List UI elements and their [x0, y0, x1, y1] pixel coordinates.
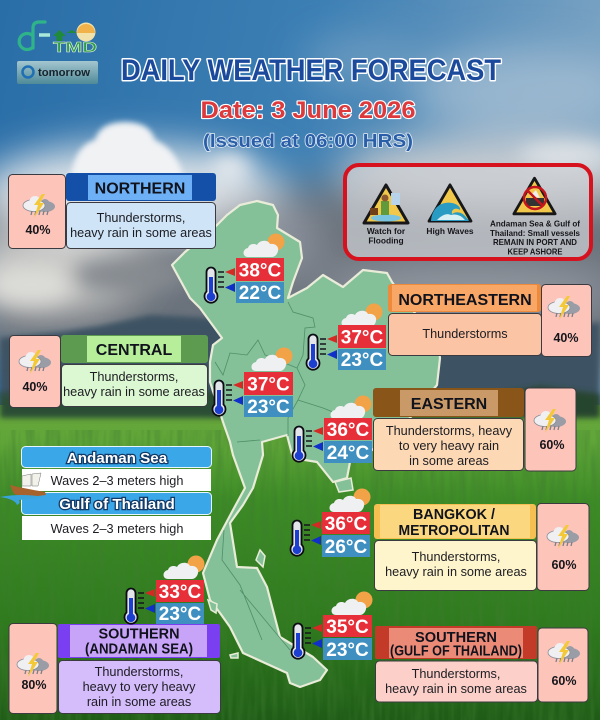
gulf of thailand waves: Waves 2–3 meters high	[51, 522, 183, 536]
gulf of thailand heading	[22, 492, 212, 514]
central temperatures: 23°C	[247, 397, 290, 418]
southern gulf rain chance	[538, 628, 588, 702]
southern andaman rain chance: 80%	[21, 678, 47, 692]
southern gulf conditions	[376, 661, 538, 702]
eastern heading: EASTERN	[411, 396, 487, 413]
central conditions: heavy rain in some areas	[63, 385, 205, 399]
southern andaman heading	[58, 624, 220, 658]
southern gulf temperatures: 23°C	[326, 640, 369, 661]
northern rain chance: 40%	[25, 223, 51, 237]
logo: DFE mark	[19, 22, 50, 50]
central heading: CENTRAL	[96, 342, 172, 359]
southern andaman conditions	[58, 660, 220, 714]
southern gulf rain chance: 60%	[551, 674, 577, 688]
bangkok heading: METROPOLITAN	[398, 523, 510, 539]
label: watch for flooding: Watch for	[367, 226, 406, 236]
southern andaman heading: (ANDAMAN SEA)	[85, 642, 193, 658]
label: high waves: High Waves	[426, 226, 474, 236]
bangkok rain chance	[537, 504, 589, 590]
logo: tomorrow: tomorrow	[38, 67, 90, 79]
map: regional boundaries	[215, 302, 345, 650]
northeastern temperatures: 23°C	[341, 350, 384, 371]
andaman sea waves	[22, 469, 211, 491]
map: Trat tail and islands	[208, 478, 353, 658]
northern heading: NORTHERN	[95, 180, 185, 198]
eastern conditions: to very heavy rain	[399, 439, 499, 453]
label: watch for flooding: Flooding	[368, 236, 404, 246]
andaman sea heading: Andaman Sea	[67, 450, 168, 467]
northern conditions	[66, 202, 216, 248]
northeastern heading	[388, 284, 541, 312]
logos	[17, 22, 98, 84]
northeastern rain chance	[542, 284, 592, 356]
southern andaman conditions: Thunderstorms,	[95, 665, 183, 679]
label: small vessels advisory: KEEP ASHORE	[508, 246, 563, 256]
southern andaman conditions: rain in some areas	[87, 695, 191, 709]
southern andaman temperatures: 33°C	[159, 582, 202, 603]
central conditions: Thunderstorms,	[90, 370, 178, 384]
northern heading	[66, 173, 216, 201]
bangkok conditions: Thunderstorms,	[412, 550, 500, 564]
panel: eastern	[373, 388, 576, 471]
panel: bangkok metropolitan	[374, 504, 589, 590]
icon: high waves warning	[429, 185, 471, 221]
southern gulf conditions: Thunderstorms,	[412, 667, 500, 681]
bangkok heading: BANGKOK /	[413, 507, 495, 523]
andaman sea heading	[22, 446, 212, 468]
andaman sea waves: Waves 2–3 meters high	[51, 474, 183, 488]
northeastern conditions: Thunderstorms	[422, 327, 508, 341]
eastern rain chance: 60%	[539, 438, 565, 452]
central temperatures	[212, 348, 293, 418]
panel: southern andaman sea	[9, 624, 220, 714]
northern temperatures: 38°C	[239, 260, 282, 282]
gulf of thailand heading: Gulf of Thailand	[59, 496, 175, 513]
southern andaman temperatures	[124, 556, 204, 625]
southern andaman conditions: heavy to very heavy	[83, 680, 196, 694]
gulf of thailand waves	[22, 516, 211, 540]
eastern conditions: Thunderstorms, heavy	[386, 424, 513, 438]
bangkok temperatures	[290, 488, 370, 558]
bangkok temperatures: 36°C	[325, 514, 368, 535]
label: small vessels advisory: Thailand: Small vessels	[490, 228, 580, 238]
background: white cumulus	[70, 122, 184, 180]
eastern temperatures: 24°C	[327, 443, 370, 464]
central rain chance	[10, 336, 60, 408]
northern rain chance	[8, 174, 66, 248]
panel: southern gulf of thailand	[375, 626, 588, 702]
northern conditions: Thunderstorms,	[97, 211, 185, 225]
central conditions	[62, 364, 208, 406]
date: Date: 3 June 2026	[200, 97, 416, 124]
panel: central	[10, 335, 208, 408]
northern temperatures	[204, 234, 284, 304]
central rain chance: 40%	[22, 380, 48, 394]
southern gulf conditions: heavy rain in some areas	[385, 682, 527, 696]
northeastern temperatures: 37°C	[341, 328, 384, 348]
title: DAILY WEATHER FORECAST	[121, 54, 501, 87]
central heading	[61, 335, 208, 363]
southern andaman rain chance	[9, 624, 57, 714]
southern andaman heading: SOUTHERN	[98, 626, 180, 642]
eastern temperatures	[292, 396, 372, 464]
bangkok conditions	[374, 540, 536, 590]
label: small vessels advisory: Andaman Sea & Gulf of	[490, 218, 580, 228]
label: small vessels advisory: REMAIN IN PORT AND	[493, 237, 577, 247]
bangkok conditions: heavy rain in some areas	[385, 565, 527, 579]
panel: northern	[8, 173, 216, 248]
panel: sea conditions	[0, 446, 212, 540]
northeastern rain chance: 40%	[553, 331, 579, 345]
southern andaman temperatures: 23°C	[159, 604, 202, 625]
issued time: (Issued at 06:00 HRS)	[203, 131, 413, 151]
bangkok rain chance: 60%	[551, 558, 577, 572]
eastern heading	[373, 388, 524, 417]
eastern rain chance	[525, 388, 576, 471]
northern conditions: heavy rain in some areas	[70, 226, 212, 240]
southern gulf heading	[375, 626, 537, 660]
southern gulf heading: (GULF OF THAILAND)	[390, 644, 522, 660]
southern gulf temperatures	[292, 592, 372, 661]
icon: flooding warning	[364, 185, 408, 223]
warning panel	[345, 165, 591, 259]
eastern conditions: in some areas	[409, 454, 489, 468]
icon: small vessels warning	[514, 178, 555, 214]
panel: northeastern	[388, 284, 592, 356]
central temperatures: 37°C	[247, 374, 290, 396]
eastern conditions	[374, 418, 524, 470]
southern gulf temperatures: 35°C	[326, 617, 369, 638]
southern gulf heading: SOUTHERN	[415, 630, 497, 646]
northern temperatures: 22°C	[239, 283, 282, 304]
map of Thailand	[172, 201, 440, 687]
northeastern temperatures	[306, 304, 386, 371]
northeastern heading: NORTHEASTERN	[398, 292, 532, 309]
eastern temperatures: 36°C	[327, 420, 370, 441]
logo: TMD: TMD	[53, 39, 97, 56]
bangkok heading	[374, 504, 536, 539]
icon: boat	[0, 473, 46, 505]
northeastern conditions	[388, 314, 542, 356]
bangkok temperatures: 26°C	[325, 537, 368, 558]
